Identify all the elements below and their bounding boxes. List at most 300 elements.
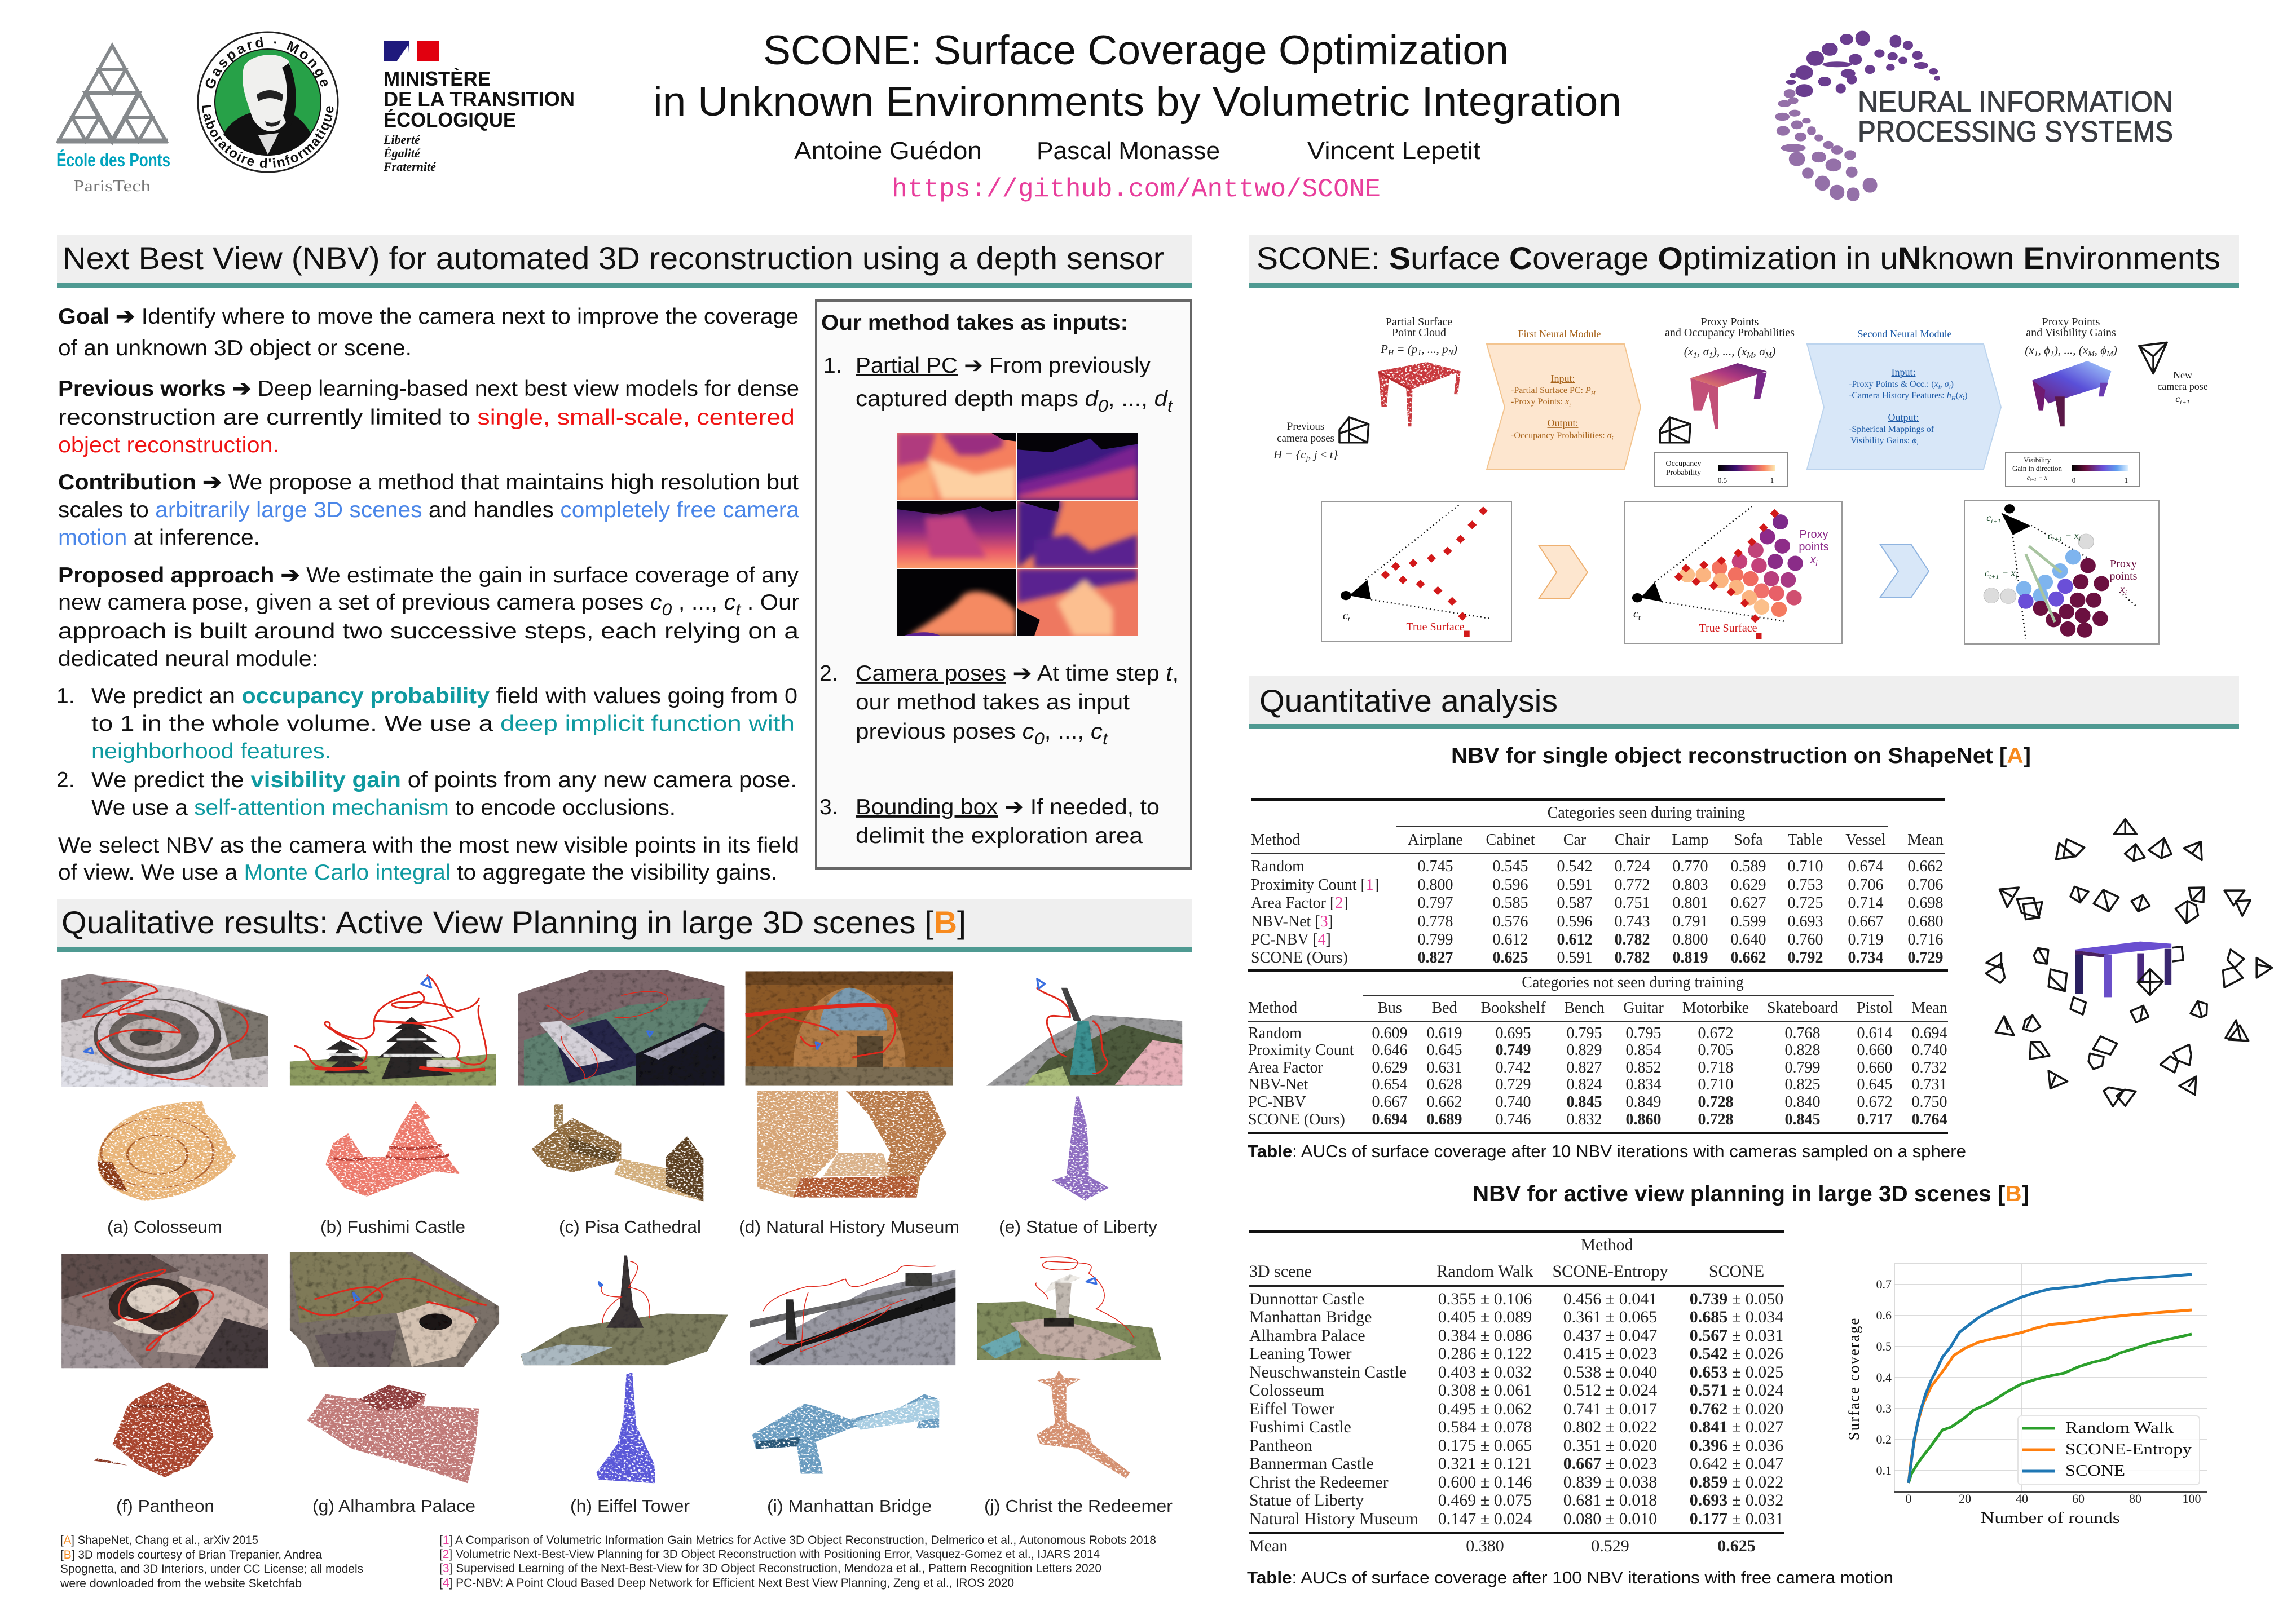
diagram: visibility gains: j (2015, 572, 2018, 580)
table: active view planning: SCONE-Entropy (1552, 1262, 1668, 1281)
table: single object seen categories: Sofa (1734, 831, 1763, 849)
diagram: true surface points: True Surface (1406, 621, 1465, 633)
table: single object seen categories: 0.674 (1848, 858, 1884, 875)
diagram: visibility gains: t+1 (1989, 572, 1999, 580)
table: single object seen categories: Proximity Count [1] (1251, 876, 1379, 894)
table: active view planning: 0.538 ± 0.040 (1563, 1363, 1657, 1382)
table: single object unseen categories: Pistol (1857, 999, 1893, 1017)
image: Fushimi Castle views (290, 975, 496, 1086)
table: single object seen categories: Cabinet (1486, 831, 1535, 849)
legend: Random Walk (2065, 1419, 2174, 1437)
logo: NeurIPS: PROCESSING SYSTEMS (1858, 116, 2173, 148)
column: partial point cloud: Point Cloud (1392, 326, 1446, 339)
table: single object unseen categories: 0.749 (1496, 1042, 1531, 1059)
table: active view planning: 0.802 ± 0.022 (1563, 1418, 1657, 1436)
table: active view planning: 0.584 ± 0.078 (1438, 1418, 1532, 1436)
table: active view planning: 0.380 (1466, 1537, 1504, 1555)
labels: new camera pose: New (2173, 369, 2192, 381)
table: active view planning: Mean (1249, 1537, 1288, 1555)
caption row one: (e) Statue of Liberty (999, 1217, 1158, 1237)
axis ticks: 0.2 (1876, 1432, 1892, 1446)
table: active view planning: 0.456 ± 0.041 (1563, 1290, 1657, 1308)
table: active view planning: 0.080 ± 0.010 (1563, 1510, 1657, 1528)
point cloud: Fushimi Castle (325, 1101, 460, 1197)
table: single object unseen categories: 0.845 (1784, 1111, 1821, 1128)
labels: new camera pose: camera pose (2157, 381, 2208, 392)
axis ticks: 20 (1959, 1491, 1971, 1506)
module: second neural module: -Proxy Points & Occ.: (x (1849, 379, 1938, 389)
references: datasets: [A] ShapeNet, Chang et al., arXiv 2015 (60, 1534, 258, 1547)
table: active view planning: 0.529 (1591, 1537, 1629, 1555)
table: active view planning: 0.361 ± 0.065 (1563, 1308, 1657, 1326)
table: active view planning: Statue of Liberty (1249, 1491, 1364, 1510)
table: single object unseen categories: 0.795 (1625, 1025, 1662, 1042)
labels: previous camera poses: H = {c (1273, 448, 1306, 461)
axis ticks: 0.3 (1876, 1401, 1892, 1415)
column: proxy points and visibility: , ϕ (2038, 343, 2050, 357)
column: proxy points and visibility (2025, 316, 2117, 426)
table: single object seen categories: 0.778 (1418, 913, 1453, 930)
references: datasets: [B] 3D models courtesy of Brian Trepanier, Andrea (60, 1548, 322, 1561)
table: single object seen categories: 0.751 (1614, 894, 1650, 912)
module: second neural module: i (1938, 384, 1940, 391)
module: second neural module: , σ (1940, 379, 1950, 389)
labels: previous camera poses: camera poses (1277, 433, 1334, 444)
input one: partial PC: d (1154, 387, 1168, 411)
table: single object unseen categories: 0.799 (1784, 1059, 1821, 1076)
labels: new camera pose: t+1 (2180, 398, 2190, 406)
logo: Gaspard Monge laboratory: Gaspard · Monge (205, 37, 328, 88)
table: single object unseen categories: 0.728 (1698, 1093, 1734, 1111)
column: partial point cloud: , ..., p (1421, 342, 1448, 356)
table: active view planning: 0.437 ± 0.047 (1563, 1326, 1657, 1345)
table: single object seen categories: Random (1251, 858, 1305, 875)
table: active view planning: 0.571 ± 0.024 (1690, 1381, 1783, 1400)
module: first neural module: i (1569, 401, 1571, 408)
table: single object unseen categories: Skateboard (1767, 999, 1838, 1017)
references: datasets: Spognetta, and 3D Interiors, under CC License; all models (60, 1563, 363, 1576)
caption row one: (b) Fushimi Castle (320, 1217, 465, 1237)
image: Christ the Redeemer views (977, 1257, 1161, 1360)
table: active view planning: 0.693 ± 0.032 (1690, 1491, 1783, 1510)
contribution paragraph: motion at inference. (58, 526, 260, 550)
diagram: SCONE pipeline (1273, 316, 2208, 486)
table: single object unseen categories: 0.849 (1625, 1093, 1662, 1111)
input one: partial PC: 0 (1098, 397, 1108, 416)
legend: visibility gain: 1 (2125, 476, 2128, 484)
legend: visibility gain: − x (2037, 474, 2048, 482)
legend: visibility gain (2006, 453, 2139, 486)
axis ticks: 0.4 (1876, 1370, 1892, 1384)
step two: We use a self-attention mechanism to encode occlusions. (91, 796, 676, 820)
table: active view planning: Natural History Museum (1249, 1510, 1418, 1528)
table: single object unseen categories: Bookshelf (1480, 999, 1546, 1017)
table: single object seen categories: 0.599 (1730, 913, 1766, 930)
table: active view planning: 0.384 ± 0.086 (1438, 1326, 1532, 1345)
table: single object unseen categories: 0.619 (1427, 1025, 1462, 1042)
input three: bounding box: Bounding box ➔ If needed, to (856, 795, 1160, 819)
diagram: proxy points occupancy: x (1810, 554, 1816, 566)
input one: partial PC: t (1167, 397, 1174, 416)
table: single object unseen categories: Proximity Count (1248, 1042, 1354, 1059)
table: single object unseen categories: Bench (1564, 999, 1605, 1017)
table: single object unseen categories: Random (1248, 1025, 1302, 1042)
caption row two: (f) Pantheon (116, 1496, 214, 1516)
table: single object unseen categories: 0.840 (1784, 1093, 1821, 1111)
table: active view planning: 0.177 ± 0.031 (1690, 1510, 1783, 1528)
diagram: proxy points occupancy: points (1799, 541, 1829, 553)
module: second neural module: Second Neural Module (1858, 328, 1951, 339)
table: single object seen categories: 0.819 (1673, 949, 1708, 967)
legend: visibility gain: Gain in direction (2012, 464, 2063, 473)
table: single object seen categories: 0.792 (1788, 949, 1823, 967)
table: single object unseen categories: 0.667 (1372, 1093, 1408, 1111)
table: single object seen categories: 0.719 (1848, 931, 1884, 948)
caption row one: (a) Colosseum (107, 1217, 222, 1237)
logo: French ministry: ÉCOLOGIQUE (384, 108, 516, 131)
module: second neural module: (x (1956, 391, 1963, 400)
section heading: Qualitative results (57, 899, 1192, 952)
diagram: visibility gains: − x (2062, 530, 2079, 541)
diagram: visibility gains: Proxy (2110, 558, 2137, 570)
table: single object unseen categories: 0.689 (1427, 1111, 1462, 1128)
step one: 1. (56, 684, 75, 708)
legend: SCONE (2065, 1462, 2125, 1480)
table: single object unseen categories: 0.795 (1567, 1025, 1602, 1042)
section heading: Qualitative results: Qualitative results: Active View Planning in large 3D scenes [ B] (61, 904, 966, 940)
input two: camera poses: , ..., (1045, 720, 1091, 744)
point cloud: Manhattan Bridge (752, 1394, 939, 1474)
module: first neural module: i (1612, 435, 1614, 442)
axis ticks: 0 (1905, 1491, 1912, 1506)
caption: table one: Table: AUCs of surface coverage after 10 NBV iterations with cameras sampled on a sphere (1248, 1141, 1966, 1161)
project url: https://github.com/Anttwo/SCONE (892, 175, 1381, 204)
labels: new camera pose: c (2175, 393, 2180, 404)
table: single object unseen categories: 0.746 (1496, 1111, 1531, 1128)
table: single object seen categories: Categories seen during training (1548, 804, 1745, 822)
table: single object unseen categories: 0.750 (1912, 1093, 1947, 1111)
previous works paragraph: object reconstruction. (58, 433, 279, 457)
point cloud: Natural History Museum (757, 1091, 946, 1198)
authors: Pascal Monasse (1037, 137, 1220, 165)
table: active view planning: 0.405 ± 0.089 (1438, 1308, 1532, 1326)
diagram: visibility gains: x (2120, 583, 2125, 595)
column: partial point cloud: H (1387, 349, 1394, 358)
input one: partial PC: , ..., (1108, 387, 1154, 411)
table: single object seen categories: 0.698 (1907, 894, 1944, 912)
logo: French ministry: Fraternité (383, 160, 437, 174)
references: papers: [4] PC-NBV: A Point Cloud Based Deep Network for Efficient Next Best View Planning, Zeng et al., IROS 2020 (439, 1577, 1014, 1590)
section heading: Quantitative analysis (1249, 676, 2239, 729)
table: single object unseen categories: 0.672 (1857, 1093, 1893, 1111)
table: single object seen categories: Mean (1907, 831, 1944, 849)
table: active view planning: 0.667 ± 0.023 (1563, 1454, 1657, 1473)
table: single object unseen categories: 0.729 (1496, 1076, 1531, 1093)
caption row two: (h) Eiffel Tower (570, 1496, 690, 1516)
labels: previous camera poses: Previous (1287, 421, 1324, 433)
table: active view planning: 0.542 ± 0.026 (1690, 1344, 1783, 1363)
table: single object unseen categories: Bus (1377, 999, 1402, 1017)
column: proxy points and occupancy: ) (1771, 345, 1775, 358)
table: single object unseen categories: Area Factor (1248, 1059, 1324, 1076)
table: single object seen categories: 0.797 (1418, 894, 1453, 912)
logo: NeurIPS: NEURAL INFORMATION (1858, 86, 2173, 118)
table: single object seen categories: SCONE (Ours) (1251, 949, 1348, 967)
diagram: visibility gains: t+1 (1991, 517, 2001, 525)
NBV selection paragraph: of view. We use a Monte Carlo integral to aggregate the visibility gains. (58, 860, 777, 885)
table: single object unseen categories: 0.834 (1625, 1076, 1662, 1093)
table: active view planning: 0.147 ± 0.024 (1438, 1510, 1532, 1528)
table: single object seen categories: 0.743 (1614, 913, 1650, 930)
point cloud: Pisa Cathedral (531, 1104, 703, 1201)
input one: partial PC: 1. (823, 354, 842, 378)
table: single object seen categories: 0.596 (1492, 876, 1528, 894)
table: single object unseen categories: 0.662 (1427, 1093, 1462, 1111)
table: single object unseen categories: 0.710 (1698, 1076, 1734, 1093)
table: single object unseen categories: 0.764 (1912, 1111, 1947, 1128)
table: single object unseen categories: 0.695 (1496, 1025, 1531, 1042)
section heading: Next Best View (57, 235, 1192, 288)
authors: Antoine Guédon (794, 137, 982, 165)
input one: partial PC (823, 354, 1174, 416)
previous works paragraph (58, 377, 799, 457)
table: active view planning: 0.175 ± 0.065 (1438, 1436, 1532, 1455)
contribution paragraph (58, 470, 799, 550)
labels: new camera pose (2157, 369, 2208, 406)
point cloud: Statue of Liberty (1051, 1097, 1109, 1201)
table: single object seen categories: 0.625 (1492, 949, 1528, 967)
table: single object seen categories: 0.591 (1557, 949, 1593, 967)
table: single object unseen categories: 0.732 (1912, 1059, 1947, 1076)
column: proxy points and visibility: 1 (2050, 350, 2054, 359)
table: single object seen categories: 0.791 (1673, 913, 1708, 930)
diagram: true surface points: t (1348, 615, 1350, 623)
input two: camera poses: t (1103, 730, 1109, 748)
table: single object unseen categories: 0.629 (1372, 1059, 1408, 1076)
table: single object unseen categories: 0.660 (1857, 1059, 1893, 1076)
table: single object unseen categories: 0.845 (1567, 1093, 1602, 1111)
module: second neural module (1807, 328, 2001, 469)
column: proxy points and visibility: M (2106, 350, 2114, 359)
previous works paragraph: reconstruction are currently limited to single, small-scale, centered (58, 405, 795, 430)
image: Eiffel Tower views (521, 1255, 728, 1365)
table: active view planning: 3D scene (1249, 1262, 1312, 1281)
legend: occupancy probability: 1 (1770, 476, 1774, 484)
title: in Unknown Environments by Volumetric Integration (653, 79, 1621, 125)
axis ticks (1876, 1277, 2201, 1506)
module: second neural module: H (1951, 395, 1956, 402)
previous works paragraph: Previous works ➔ Deep learning-based next best view models for dense (58, 377, 799, 401)
table: single object unseen categories: 0.628 (1427, 1076, 1462, 1093)
table: single object unseen categories: 0.768 (1784, 1025, 1821, 1042)
table: single object seen categories: 0.724 (1614, 858, 1650, 875)
input two: camera poses: c (1091, 720, 1103, 744)
labels: previous camera poses: , j ≤ t} (1308, 448, 1338, 461)
table: single object seen categories: 0.545 (1492, 858, 1528, 875)
image: Alhambra Palace views (290, 1252, 499, 1367)
section heading: Next Best View: Next Best View (NBV) for automated 3D reconstruction using a depth sensor (63, 240, 1164, 276)
table: single object seen categories: 0.640 (1730, 931, 1766, 948)
module: second neural module: i (1963, 395, 1964, 402)
column: partial point cloud: P (1381, 342, 1388, 356)
table: single object seen categories: 0.760 (1788, 931, 1823, 948)
curves (1909, 1274, 2192, 1483)
labels: previous camera poses (1273, 421, 1338, 463)
caption row two: (j) Christ the Redeemer (984, 1496, 1173, 1516)
proposed approach paragraph: . Our (741, 590, 799, 615)
diagram: true surface points: c (1343, 610, 1348, 622)
point cloud: Pantheon (94, 1382, 213, 1477)
title (653, 28, 1621, 125)
legend: occupancy probability: 0.5 (1718, 476, 1727, 484)
references: datasets (60, 1534, 363, 1590)
legend (2018, 1416, 2200, 1485)
caption row one: (d) Natural History Museum (739, 1217, 959, 1237)
contribution paragraph: Contribution ➔ We propose a method that maintains high resolution but (58, 470, 799, 495)
table: single object seen categories: 0.801 (1673, 894, 1708, 912)
table: single object unseen categories: 0.824 (1567, 1076, 1602, 1093)
table: single object seen categories: 0.803 (1673, 876, 1708, 894)
legend: visibility gain: c (2027, 474, 2030, 482)
column: proxy points and occupancy: 1 (1693, 351, 1697, 360)
table object (2075, 942, 2171, 997)
table: single object unseen categories: 0.694 (1912, 1025, 1947, 1042)
table: single object seen categories: 0.591 (1557, 876, 1593, 894)
chart: camera sphere around table (1986, 819, 2272, 1106)
column: proxy points and visibility: 1 (2034, 350, 2038, 359)
step two (56, 768, 797, 820)
legend: visibility gain: 0 (2072, 476, 2075, 484)
labels: previous camera poses: j (1305, 454, 1308, 463)
table: single object seen categories: Area Factor [2] (1251, 894, 1348, 912)
table: single object unseen categories: 0.672 (1698, 1025, 1734, 1042)
module: second neural module: Output: (1888, 412, 1919, 423)
diagram: visibility gains: i (2079, 535, 2081, 543)
table: active view planning: 0.308 ± 0.061 (1438, 1381, 1532, 1400)
input two: camera poses (819, 661, 1179, 748)
table: single object unseen categories: 0.631 (1427, 1059, 1462, 1076)
input two: camera poses: our method takes as input (856, 690, 1130, 714)
table: single object seen categories: 0.629 (1730, 876, 1766, 894)
caption row two: (i) Manhattan Bridge (767, 1496, 932, 1516)
module: second neural module: Visibility Gains: ϕ (1850, 436, 1917, 445)
references: datasets: were downloaded from the website Sketchfab (60, 1577, 302, 1590)
module: first neural module (1487, 328, 1641, 470)
legend: visibility gain: Visibility (2024, 456, 2051, 464)
table: active view planning: 0.396 ± 0.036 (1690, 1436, 1783, 1455)
input one: partial PC: Partial PC ➔ From previously (856, 354, 1151, 378)
NBV selection paragraph (58, 833, 799, 885)
table: single object seen categories: 0.612 (1557, 931, 1593, 948)
table: single object seen categories: Vessel (1845, 831, 1886, 849)
column: proxy points and visibility: ) (2113, 343, 2117, 357)
table: active view planning: 0.415 ± 0.023 (1563, 1344, 1657, 1363)
table: single object seen categories: 0.627 (1730, 894, 1766, 912)
table: single object unseen categories: 0.660 (1857, 1042, 1893, 1059)
table: single object unseen categories: 0.827 (1567, 1059, 1602, 1076)
table: single object seen categories (1248, 798, 1948, 972)
table: single object seen categories: 0.680 (1907, 913, 1944, 930)
table: single object unseen categories: 0.609 (1372, 1025, 1408, 1042)
table: active view planning: 0.859 ± 0.022 (1690, 1473, 1783, 1491)
axis labels: Number of rounds (1981, 1509, 2120, 1527)
module: first neural module: H (1590, 390, 1596, 397)
module: second neural module: -Spherical Mappings of (1849, 425, 1934, 434)
heading: large scenes: NBV for active view planning in large 3D scenes [ B] (1473, 1182, 2029, 1206)
logo: French ministry: Égalité (383, 146, 421, 160)
table: active view planning: 0.741 ± 0.017 (1563, 1400, 1657, 1418)
section heading: SCONE: SCONE: Surface Coverage Optimization in uNknown Environments (1257, 240, 2220, 276)
section heading: Quantitative analysis: Quantitative analysis (1259, 683, 1558, 718)
table: active view planning: 0.841 ± 0.027 (1690, 1418, 1783, 1436)
column: proxy points and visibility: , ϕ (2095, 343, 2106, 357)
references: papers: [3] Supervised Learning of the Next-Best-View for 3D Object Reconstruction, Mendoza et al., Pattern Recognition Letters 2020 (439, 1562, 1101, 1575)
table: active view planning: Christ the Redeemer (1249, 1473, 1389, 1491)
column: proxy points and occupancy: , σ (1697, 345, 1710, 358)
image: Manhattan Bridge views (750, 1266, 955, 1365)
table: active view planning: 0.512 ± 0.024 (1563, 1381, 1657, 1400)
module: first neural module: -Occupancy Probabilities: σ (1511, 431, 1612, 440)
table: active view planning: 0.762 ± 0.020 (1690, 1400, 1783, 1418)
table: single object seen categories: 0.576 (1492, 913, 1528, 930)
table: single object seen categories: 0.772 (1614, 876, 1650, 894)
module: first neural module: Output: (1547, 417, 1579, 429)
module: second neural module: Input: (1892, 367, 1915, 378)
column: proxy points and occupancy: and Occupancy Probabilities (1665, 326, 1795, 339)
table: active view planning: 0.681 ± 0.018 (1563, 1491, 1657, 1510)
table: single object unseen categories: 0.860 (1625, 1111, 1662, 1128)
point cloud: Eiffel Tower (597, 1373, 655, 1483)
logo: French ministry: Liberté (383, 133, 421, 147)
depth maps (897, 433, 1138, 636)
table: single object unseen categories: 0.731 (1912, 1076, 1947, 1093)
logo: Ecole des Ponts (56, 46, 170, 195)
NBV selection paragraph: We select NBV as the camera with the most new visible points in its field (58, 833, 799, 858)
input two: camera poses: 2. (819, 661, 838, 686)
column: partial point cloud (1378, 316, 1461, 426)
arrow: blue chevron (1880, 545, 1929, 597)
module: second neural module: ) (1951, 379, 1954, 389)
table: single object seen categories: 0.667 (1848, 913, 1884, 930)
diagram: proxy points occupancy: True Surface (1699, 622, 1757, 634)
column: proxy points and occupancy: 1 (1709, 351, 1713, 360)
diagram: proxy points occupancy: Proxy (1799, 528, 1828, 541)
table: single object seen categories: 0.542 (1557, 858, 1593, 875)
table: single object unseen categories: Guitar (1623, 999, 1664, 1017)
table: single object unseen categories: 0.852 (1625, 1059, 1662, 1076)
module: first neural module: -Partial Surface PC: P (1511, 386, 1591, 395)
logo: Gaspard Monge laboratory: Laboratoire d'informatique (202, 105, 334, 168)
table: single object seen categories: 0.745 (1418, 858, 1453, 875)
caption: table two: Table: AUCs of surface coverage after 100 NBV iterations with free camera motion (1247, 1568, 1893, 1587)
table: single object seen categories: 0.589 (1730, 858, 1766, 875)
diagram: proxy points occupancy: i (1816, 559, 1818, 567)
authors (794, 137, 1480, 165)
point cloud: Christ the Redeemer (1037, 1370, 1130, 1479)
text block: problem and approach (56, 304, 799, 885)
table: single object unseen categories: 0.645 (1857, 1076, 1893, 1093)
table: single object seen categories: 0.714 (1848, 894, 1884, 912)
table: single object unseen categories: 0.645 (1427, 1042, 1462, 1059)
column: proxy points and occupancy (1665, 316, 1795, 429)
table: active view planning: 0.625 (1717, 1537, 1756, 1555)
table: active view planning: 0.600 ± 0.146 (1438, 1473, 1532, 1491)
axis ticks: 100 (2183, 1491, 2201, 1506)
table: single object unseen categories: 0.825 (1784, 1076, 1821, 1093)
diagram: visibility gains: − x (1999, 567, 2016, 579)
table: single object unseen categories: 0.742 (1496, 1059, 1531, 1076)
inputs heading: Our method takes as inputs: (821, 311, 1128, 335)
